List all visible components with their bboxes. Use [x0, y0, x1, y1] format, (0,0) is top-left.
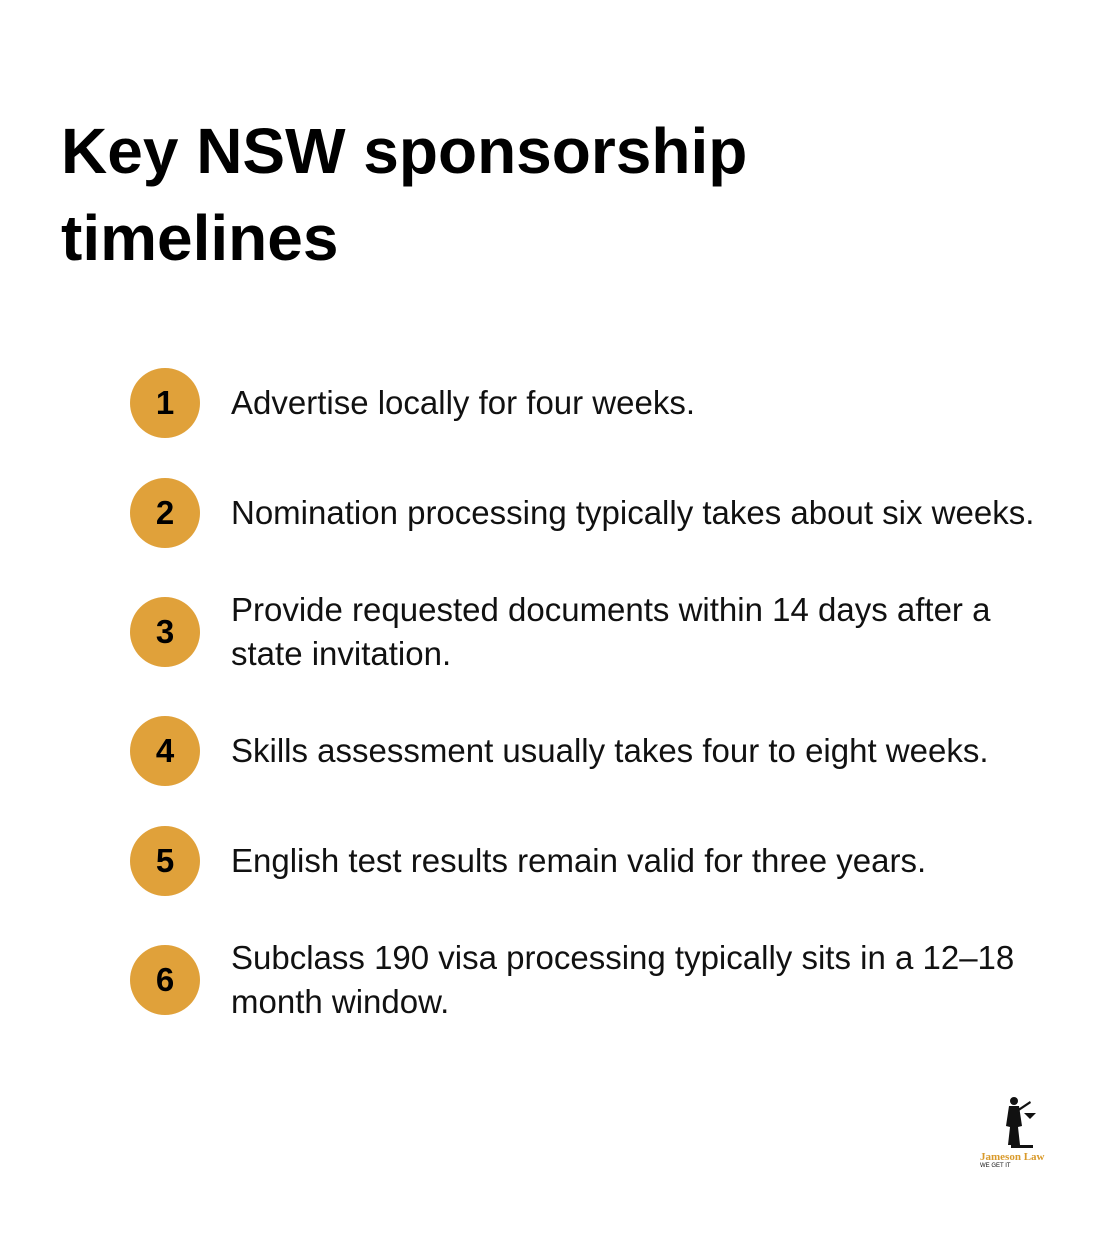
item 2: 2 — [156, 494, 174, 531]
item 3: 3 — [156, 613, 174, 650]
item 6: 6 — [156, 961, 174, 998]
title — [61, 115, 747, 274]
item 2 — [130, 478, 1034, 548]
item 1: Advertise locally for four weeks. — [231, 384, 695, 421]
item 5: 5 — [156, 842, 174, 879]
item 3: Provide requested documents within 14 days after a — [231, 591, 990, 628]
title: Key NSW sponsorship — [61, 115, 747, 187]
item 1: 1 — [156, 384, 174, 421]
item 2: Nomination processing typically takes about six weeks. — [231, 494, 1034, 531]
item 6: Subclass 190 visa processing typically sits in a 12–18 — [231, 939, 1014, 976]
item 4: 4 — [156, 732, 174, 769]
item 4 — [130, 716, 989, 786]
logo — [980, 1097, 1044, 1169]
brand text: Jameson Law — [980, 1151, 1044, 1163]
item 3 — [130, 591, 990, 672]
item 1 — [130, 368, 695, 438]
title: timelines — [61, 202, 338, 274]
item 6 — [130, 939, 1014, 1020]
logo: WE GET IT — [980, 1163, 1011, 1169]
item 5 — [130, 826, 926, 896]
item 4: Skills assessment usually takes four to eight weeks. — [231, 732, 989, 769]
icon: justice figure — [1006, 1097, 1036, 1148]
item 6: month window. — [231, 983, 449, 1020]
item 3: state invitation. — [231, 635, 451, 672]
item 5: English test results remain valid for three years. — [231, 842, 926, 879]
